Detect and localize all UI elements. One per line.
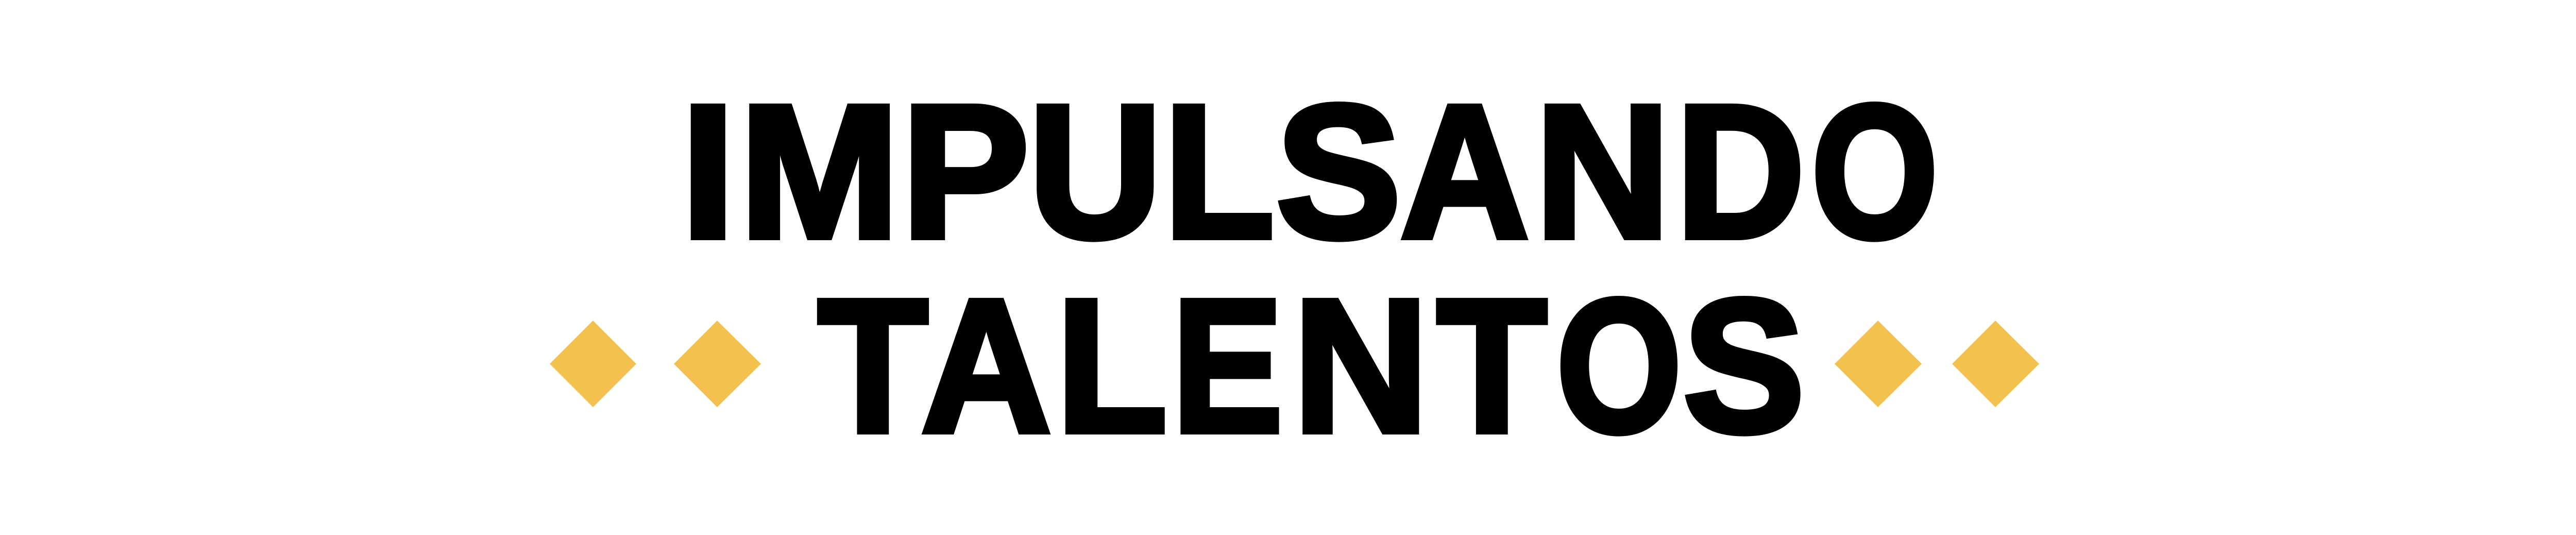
title line 1: N — [1535, 65, 1670, 277]
title line 2: O — [1556, 260, 1682, 472]
title line 1: L — [1164, 65, 1275, 277]
title line 2: N — [1293, 260, 1429, 472]
title line 2: S — [1683, 260, 1805, 472]
title line 1 — [681, 65, 1938, 277]
title line 2: A — [921, 260, 1051, 472]
title line 2: T — [1437, 260, 1547, 472]
title line 2: T — [818, 260, 928, 472]
title line 2: L — [1056, 260, 1167, 472]
title line 1: P — [902, 65, 1029, 277]
title line 1: M — [739, 65, 900, 277]
title line 1: I — [681, 65, 735, 277]
title line 1: S — [1276, 65, 1401, 277]
title line 1: D — [1676, 65, 1805, 277]
title line 1: O — [1811, 65, 1938, 277]
title line 2 — [817, 260, 1805, 472]
title line 1: A — [1400, 65, 1529, 277]
icon: left gold diamonds — [550, 321, 761, 407]
title line 2: E — [1172, 260, 1283, 472]
title line 1: U — [1028, 65, 1162, 277]
